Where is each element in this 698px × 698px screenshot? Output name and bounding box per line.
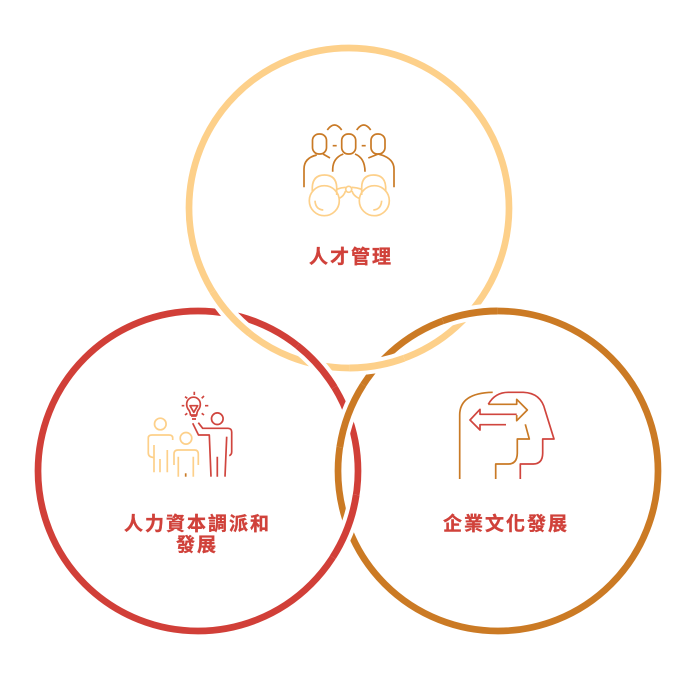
heading: talent management: 人才管理 (309, 245, 393, 268)
icon: two heads exchanging arrows (460, 392, 554, 479)
circle: human capital deployment (38, 311, 358, 631)
circle: corporate culture (338, 311, 658, 631)
icon: people with binoculars (304, 125, 394, 216)
icon: team with light bulb (148, 392, 232, 477)
heading: corporate culture development: 企業文化發展 (443, 512, 569, 535)
heading: human capital deployment (124, 513, 271, 556)
heading: human capital deployment: 人力資本調派和 (124, 513, 271, 535)
interlocking circles (38, 48, 658, 631)
heading: human capital deployment: 發展 (176, 534, 218, 556)
circle: talent management (189, 48, 509, 368)
